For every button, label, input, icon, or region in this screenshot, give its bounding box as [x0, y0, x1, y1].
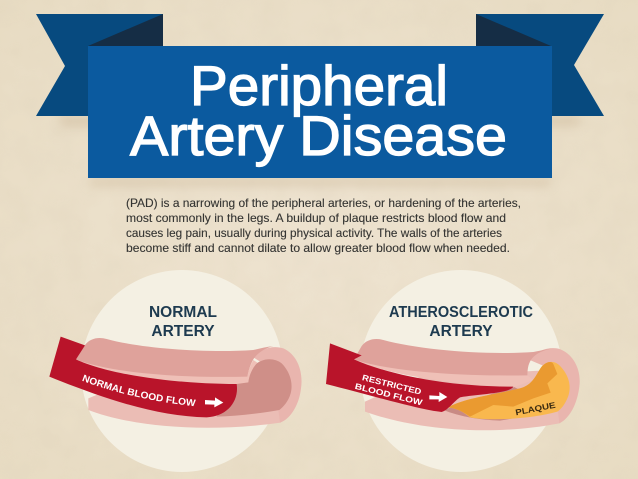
heading: atherosclerotic artery: ATHEROSCLEROTIC	[389, 304, 533, 321]
description text: (PAD) is a narrowing of the peripheral arteries, or hardening of the arteries,	[126, 196, 521, 210]
title	[130, 54, 507, 167]
description text	[126, 196, 521, 255]
heading: normal artery: NORMAL	[149, 304, 217, 321]
ribbon fold: right	[476, 14, 551, 46]
ribbon: left tail	[36, 14, 163, 116]
ribbon: right tail	[476, 14, 604, 116]
heading: normal artery	[149, 304, 217, 340]
banner shadow	[60, 116, 580, 186]
label: restricted blood flow: RESTRICTED	[361, 372, 422, 397]
heading: normal artery: ARTERY	[151, 323, 215, 340]
banner panel	[88, 46, 552, 178]
panel: normal artery	[49, 270, 302, 472]
description text: become stiff and cannot dilate to allow greater blood flow when needed.	[126, 241, 510, 255]
label: plaque: PLAQUE	[514, 400, 557, 417]
blood flow	[326, 343, 513, 412]
plaque	[448, 362, 570, 419]
ribbon fold: left	[88, 14, 163, 46]
arrow: restricted flow direction	[429, 392, 447, 402]
heading: atherosclerotic artery	[389, 304, 533, 340]
illustration: normal artery	[49, 336, 302, 428]
circle background	[81, 270, 283, 472]
blood flow	[49, 337, 237, 417]
title: Artery Disease	[130, 104, 507, 167]
label: restricted blood flow	[354, 372, 424, 407]
description text: causes leg pain, usually during physical activity. The walls of the arteries	[126, 226, 502, 240]
label: restricted blood flow: BLOOD FLOW	[354, 381, 424, 407]
label: normal blood flow: NORMAL BLOOD FLOW	[82, 374, 196, 406]
circle background	[360, 270, 562, 472]
title: Peripheral	[190, 54, 448, 117]
heading: atherosclerotic artery: ARTERY	[429, 323, 493, 340]
arrow: flow direction	[205, 397, 223, 407]
illustration: atherosclerotic artery	[326, 339, 580, 430]
panel: atherosclerotic artery	[326, 270, 580, 472]
description text: most commonly in the legs. A buildup of plaque restricts blood flow and	[126, 211, 506, 225]
